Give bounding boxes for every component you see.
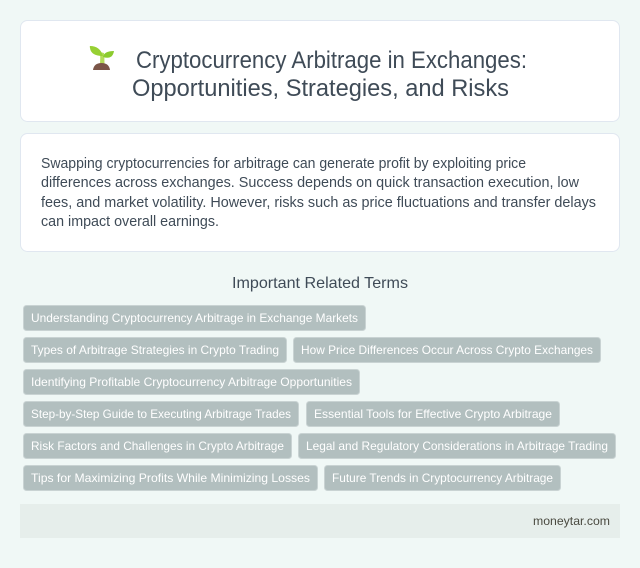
- tag: types: [24, 338, 286, 362]
- tag: understanding: Understanding Cryptocurrency Arbitrage in Exchange Markets: [31, 311, 358, 325]
- text block: summary: fees, and market volatility. However, risks such as price fluctuations and transfer delays: [41, 195, 596, 211]
- tag: step-by-step: [24, 402, 298, 426]
- tag: legal: Legal and Regulatory Considerations in Arbitrage Trading: [306, 439, 608, 453]
- tag: identifying: [24, 370, 360, 394]
- tag: tips: [24, 466, 318, 490]
- text block: summary: [41, 156, 596, 230]
- title: Cryptocurrency Arbitrage in Exchanges:: [136, 47, 527, 74]
- text block: summary: Swapping cryptocurrencies for arbitrage can generate profit by exploiting price: [41, 156, 526, 172]
- title: [132, 47, 527, 102]
- heading: related terms: Important Related Terms: [232, 275, 408, 292]
- tag: understanding: [24, 306, 366, 330]
- text block: summary: can impact overall earnings.: [41, 214, 219, 230]
- footer brand: moneytar.com: [533, 514, 610, 528]
- panel: title card: [20, 20, 620, 122]
- tag: risk factors: [24, 434, 292, 458]
- tag: price differences: How Price Differences Occur Across Crypto Exchanges: [301, 343, 593, 357]
- tag: tips: Tips for Maximizing Profits While Minimizing Losses: [31, 471, 310, 485]
- tag: types: Types of Arbitrage Strategies in Crypto Trading: [31, 343, 279, 357]
- tag: future trends: Future Trends in Cryptocurrency Arbitrage: [332, 471, 553, 485]
- tag: tools: Essential Tools for Effective Crypto Arbitrage: [314, 407, 552, 421]
- tag list: [24, 306, 616, 490]
- tag: tools: [306, 402, 560, 426]
- footer bar: [20, 504, 620, 538]
- tag: step-by-step: Step-by-Step Guide to Executing Arbitrage Trades: [31, 407, 291, 421]
- text block: summary: differences across exchanges. Success depends on quick transaction execution, low: [41, 175, 580, 191]
- tag: risk factors: Risk Factors and Challenges in Crypto Arbitrage: [31, 439, 284, 453]
- title: Opportunities, Strategies, and Risks: [132, 75, 509, 102]
- tag: price differences: [294, 338, 600, 362]
- panel: summary paragraph: [20, 134, 620, 252]
- tag: legal: [298, 434, 616, 458]
- tag: future trends: [324, 466, 560, 490]
- icon: seedling: [90, 46, 114, 70]
- tag: identifying: Identifying Profitable Cryptocurrency Arbitrage Opportunities: [31, 375, 352, 389]
